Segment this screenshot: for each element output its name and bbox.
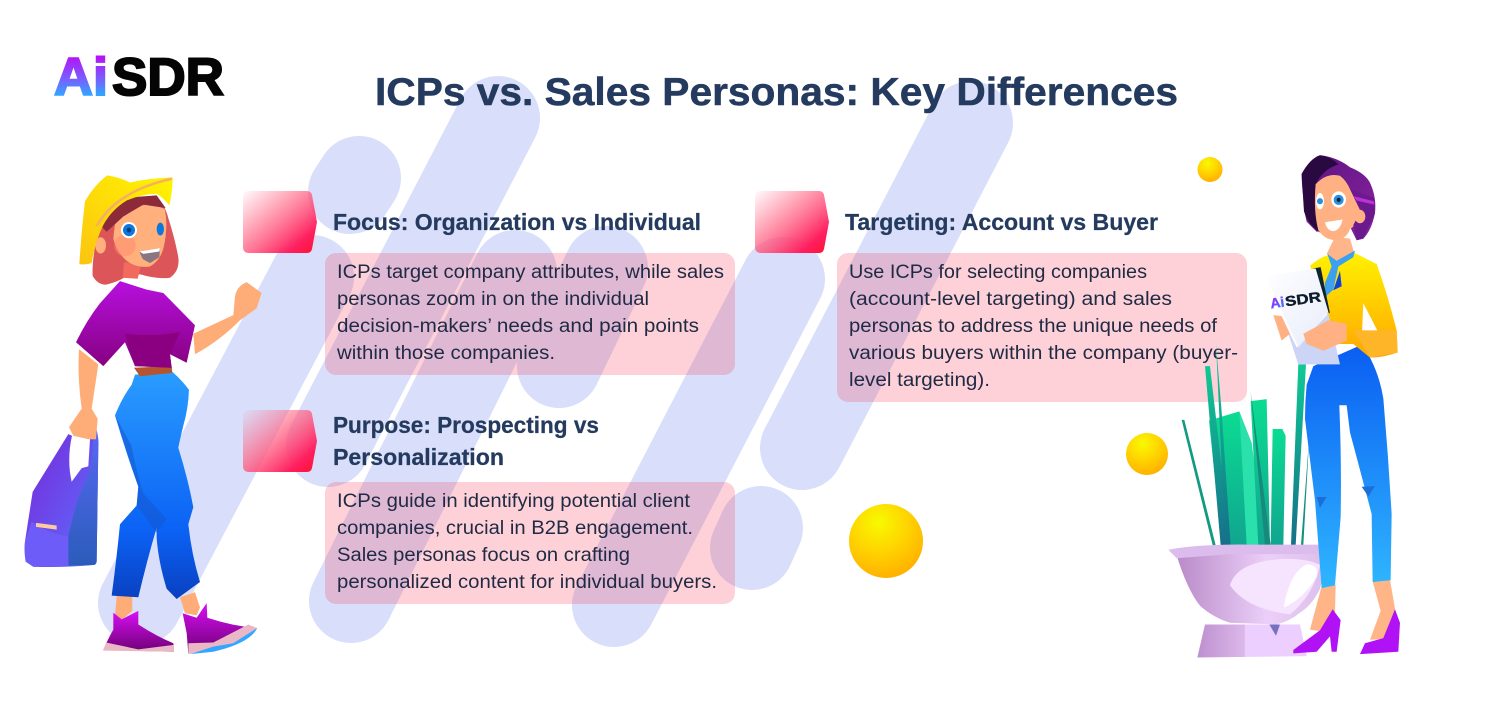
decorative yellow spheres [849,157,1222,578]
body text: targeting: level targeting). [849,370,990,391]
body text: targeting: personas to address the unique needs of [849,316,1218,337]
callout box: purpose [325,482,735,604]
leaves [1182,344,1309,545]
icon: hair and face [1302,155,1375,240]
illustration: woman with AiSDR folder [1266,155,1400,654]
background diagonal stripes [140,118,971,605]
heading: purpose: Purpose: Prospecting vs [333,412,599,438]
logo on folder: SDR [1284,288,1322,309]
icon: yellow hat [79,175,173,264]
logo: AiSDR [54,48,224,107]
body text: purpose: companies, crucial in B2B engagement. [337,518,693,539]
icon: shopping bag [25,425,98,567]
panel: focus [243,191,735,375]
body text: focus: decision-makers’ needs and pain points [337,316,699,337]
panel: targeting [755,191,1247,402]
illustration: woman with hat and bag [25,175,262,654]
logo: AiSDR: Ai [54,48,108,107]
heading: targeting: Targeting: Account vs Buyer [845,209,1158,235]
flower pot [1168,545,1327,657]
heading: purpose: Personalization [333,444,504,470]
logo: AiSDR: SDR [112,48,224,107]
logo on folder [1269,288,1322,311]
body text: targeting [849,262,1238,391]
body text: targeting: various buyers within the company (buyer- [849,343,1238,364]
icon: targeting arrow tag [755,191,829,253]
callout box: focus [325,253,735,375]
callout box: targeting [837,253,1247,402]
icon: AiSDR folder [1266,267,1340,364]
body text: purpose: Sales personas focus on crafting [337,545,630,566]
illustration: plant in pot [1168,344,1327,657]
body text: purpose: ICPs guide in identifying potential client [337,491,691,512]
icon: focus arrow tag [243,191,317,253]
body text: focus [336,262,724,364]
logo on folder: Ai [1269,294,1285,311]
body text: targeting: Use ICPs for selecting companies [849,262,1147,283]
title: ICPs vs. Sales Personas: Key Differences [375,71,1178,114]
body text: purpose [337,491,717,593]
body text: focus: ICPs target company attributes, while sales [337,262,724,283]
body text: focus: personas zoom in on the individual [337,289,649,310]
body text: targeting: (account-level targeting) and sales [849,289,1172,310]
heading: purpose [333,412,599,470]
body text: focus: within those companies. [336,343,555,364]
icon: heels [1293,609,1341,653]
icon: purpose arrow tag [243,410,317,472]
panel: purpose [243,410,735,604]
heading: focus: Focus: Organization vs Individual [333,209,701,235]
body text: purpose: personalized content for individual buyers. [337,572,717,593]
icon: hair [93,198,179,285]
